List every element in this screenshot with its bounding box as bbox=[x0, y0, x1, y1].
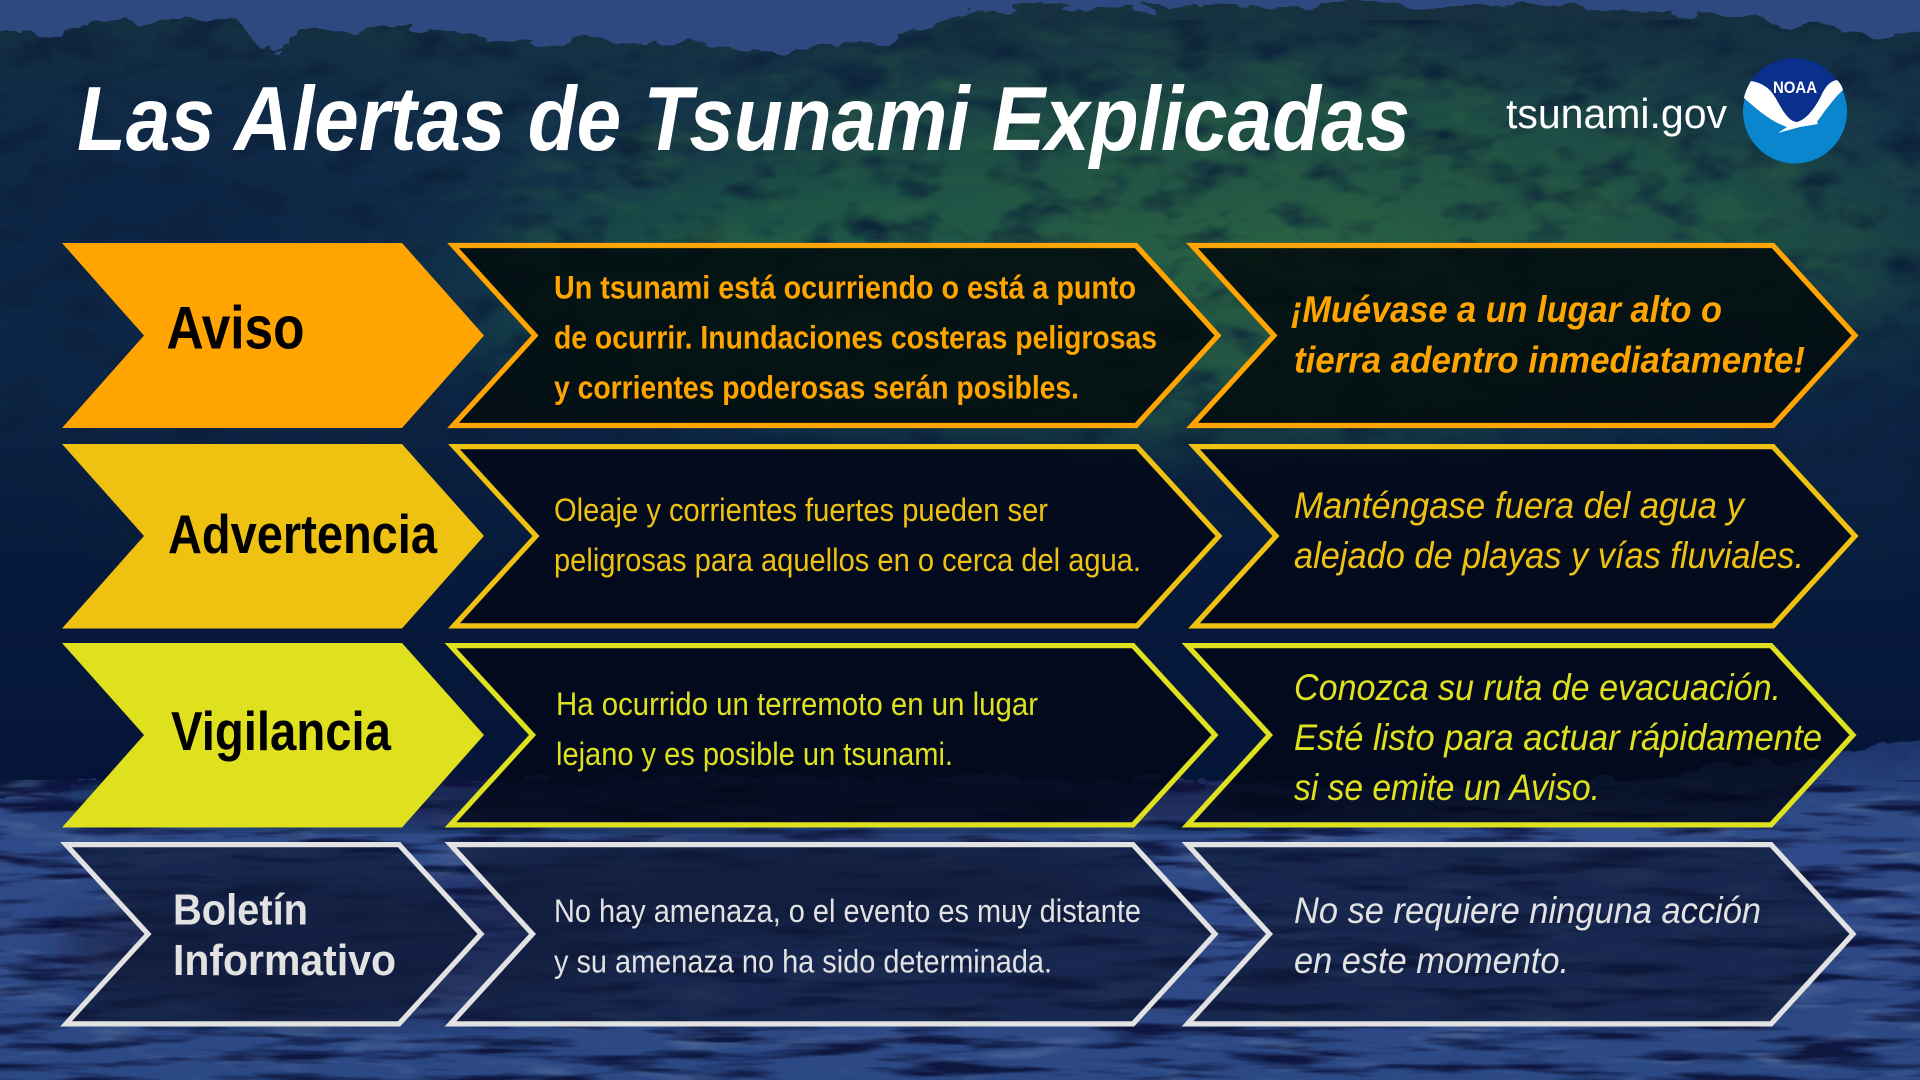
Aviso description: de ocurrir. Inundaciones costeras peligrosas bbox=[554, 320, 1157, 356]
Vigilancia action: Conozca su ruta de evacuación. bbox=[1294, 667, 1781, 708]
Vigilancia level chevron bbox=[62, 643, 484, 828]
Advertencia description: Oleaje y corrientes fuertes pueden ser bbox=[554, 492, 1048, 528]
Vigilancia description: lejano y es posible un tsunami. bbox=[556, 736, 953, 772]
Boletín Informativo action bbox=[1188, 845, 1853, 1024]
Boletín Informativo description bbox=[450, 845, 1215, 1024]
Advertencia level chevron: Advertencia bbox=[168, 503, 437, 565]
Boletín Informativo level chevron bbox=[66, 845, 481, 1024]
Boletín Informativo action: en este momento. bbox=[1294, 940, 1569, 981]
Vigilancia description: Ha ocurrido un terremoto en un lugar bbox=[556, 686, 1038, 722]
icon: NOAA logo: NOAA bbox=[1773, 78, 1817, 97]
Advertencia action: Manténgase fuera del agua y bbox=[1294, 485, 1746, 526]
Aviso action: tierra adentro inmediatamente! bbox=[1294, 340, 1805, 380]
Aviso level chevron: Aviso bbox=[166, 294, 304, 362]
icon: NOAA logo bbox=[1743, 58, 1847, 163]
title: Las Alertas de Tsunami Explicadas bbox=[77, 69, 1410, 170]
row: Advertencia bbox=[62, 444, 1855, 628]
Boletín Informativo level chevron: Boletín bbox=[173, 886, 308, 934]
Vigilancia level chevron: Vigilancia bbox=[171, 700, 391, 762]
Boletín Informativo description: No hay amenaza, o el evento es muy distante bbox=[554, 893, 1141, 929]
Boletín Informativo level chevron: Informativo bbox=[173, 936, 396, 985]
Vigilancia description bbox=[450, 646, 1215, 825]
Boletín Informativo description: y su amenaza no ha sido determinada. bbox=[554, 944, 1052, 980]
Aviso level chevron bbox=[62, 243, 484, 428]
Boletín Informativo action: No se requiere ninguna acción bbox=[1294, 890, 1761, 931]
row: Aviso bbox=[62, 243, 1855, 428]
Aviso description: Un tsunami está ocurriendo o está a punto bbox=[554, 270, 1136, 306]
Advertencia level chevron bbox=[62, 444, 484, 628]
Vigilancia action bbox=[1188, 646, 1853, 825]
Advertencia action bbox=[1194, 447, 1855, 626]
Aviso action bbox=[1192, 246, 1855, 426]
row: Boletín Informativo bbox=[66, 845, 1853, 1024]
Advertencia description: peligrosas para aquellos en o cerca del agua. bbox=[554, 542, 1141, 578]
Aviso description: y corrientes poderosas serán posibles. bbox=[554, 370, 1079, 406]
Advertencia description bbox=[454, 447, 1219, 626]
Aviso action: ¡Muévase a un lugar alto o bbox=[1291, 289, 1722, 330]
Aviso description bbox=[453, 246, 1218, 426]
row: Vigilancia bbox=[62, 643, 1853, 828]
website label: tsunami.gov bbox=[1506, 90, 1727, 137]
Advertencia action: alejado de playas y vías fluviales. bbox=[1294, 535, 1804, 576]
Vigilancia action: Esté listo para actuar rápidamente bbox=[1294, 717, 1822, 758]
Vigilancia action: si se emite un Aviso. bbox=[1294, 767, 1600, 808]
